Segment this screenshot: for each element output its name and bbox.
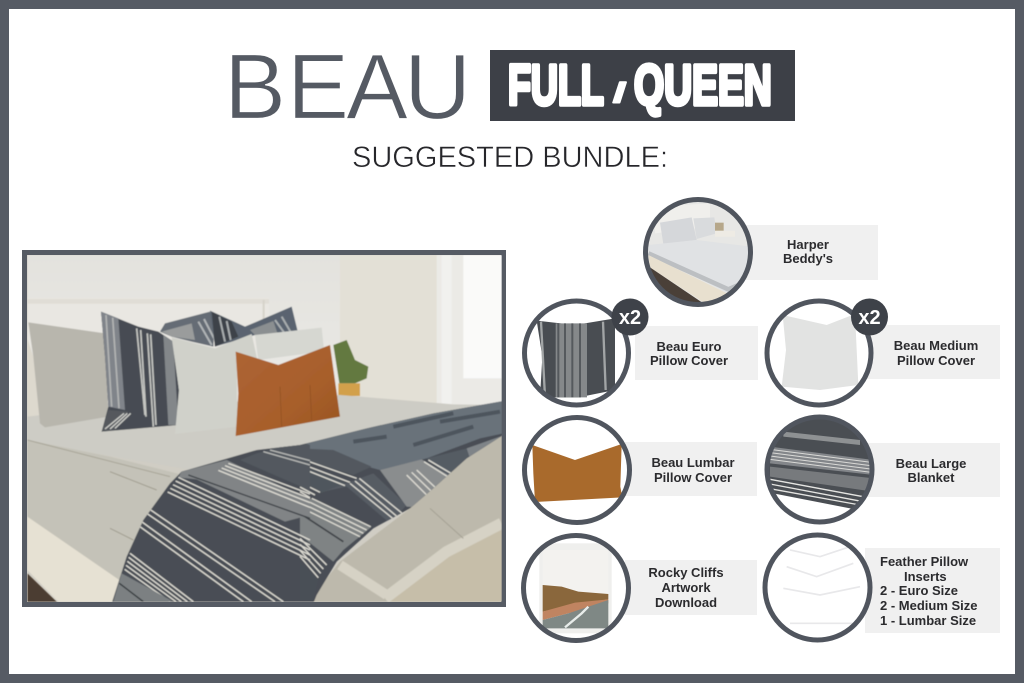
label text: Download xyxy=(655,595,717,610)
label box xyxy=(625,560,757,615)
size banner: FULL/QUEEN: / xyxy=(613,78,626,108)
leather lumbar pillow xyxy=(236,345,340,436)
panel: bedroom photo xyxy=(24,252,504,604)
item: Rocky Cliffs Artwork Download xyxy=(520,532,757,647)
ring xyxy=(524,301,628,405)
product thumbnail xyxy=(782,316,868,390)
size banner: FULL/QUEEN: QUEEN xyxy=(634,54,772,117)
ring xyxy=(646,200,750,304)
label text: Beau Medium xyxy=(894,338,978,353)
blanket xyxy=(110,400,503,603)
x2 badge xyxy=(612,298,648,336)
back left euro pillow xyxy=(160,312,214,347)
x2 badge: x2 xyxy=(619,307,641,329)
ring xyxy=(524,536,628,640)
label text: Pillow Cover xyxy=(650,353,728,368)
item: Beau Large Blanket xyxy=(760,412,1000,530)
label text: Beau Lumbar xyxy=(651,455,735,470)
size banner: FULL/QUEEN: FULL xyxy=(508,55,604,117)
label text: Beddy's xyxy=(783,251,833,266)
ring xyxy=(524,418,630,522)
label text: Artwork xyxy=(661,580,711,595)
ring xyxy=(767,301,871,405)
label text: Harper xyxy=(787,237,829,252)
product thumbnail xyxy=(532,444,627,502)
label text: Pillow Cover xyxy=(897,353,975,368)
headboard xyxy=(28,300,268,319)
walls and window xyxy=(27,255,503,415)
front euro pillow xyxy=(101,312,179,432)
white pillow back xyxy=(255,328,324,360)
x2 badge: x2 xyxy=(858,307,881,329)
hatched band left xyxy=(178,460,310,522)
floor xyxy=(27,573,58,603)
product thumbnail xyxy=(770,420,870,508)
label text: 1 - Lumbar Size xyxy=(880,613,976,628)
label text: Inserts xyxy=(904,569,947,584)
back right euro pillow xyxy=(210,307,299,347)
label box xyxy=(865,548,1000,633)
mattress right xyxy=(307,432,503,603)
product thumbnail xyxy=(648,202,748,302)
blanket upper blue-grey section xyxy=(300,401,503,470)
label text: Beau Euro xyxy=(656,339,722,354)
item: Feather Pillow Inserts xyxy=(760,530,1000,646)
grey sham pillow xyxy=(28,322,108,427)
item: Beau Lumbar Pillow Cover xyxy=(520,415,757,530)
label box xyxy=(865,443,1000,497)
bed frame xyxy=(27,517,122,603)
bed top xyxy=(102,394,480,466)
cream back pillow xyxy=(28,341,40,416)
size banner: FULL/QUEEN xyxy=(490,50,795,121)
ring xyxy=(767,417,872,522)
x2 badge xyxy=(851,298,888,336)
ring xyxy=(765,535,870,640)
white pillow front xyxy=(172,334,257,434)
product thumbnail xyxy=(537,318,615,398)
label text: Beau Large xyxy=(896,456,966,471)
product thumbnail xyxy=(540,544,626,634)
label box xyxy=(635,326,758,380)
label text: Blanket xyxy=(908,470,955,485)
title: BEAU: BEAU xyxy=(224,35,471,139)
label text: Feather Pillow xyxy=(880,554,969,569)
dark bands xyxy=(310,448,371,474)
product thumbnail xyxy=(783,547,868,624)
label text: Pillow Cover xyxy=(654,470,732,485)
item: Harper Beddy's xyxy=(640,195,878,311)
label text: 2 - Medium Size xyxy=(880,598,978,613)
grey hatched bands xyxy=(380,459,448,508)
label box xyxy=(625,442,757,496)
label box xyxy=(740,225,878,280)
label text: Rocky Cliffs xyxy=(648,565,724,580)
mattress side xyxy=(27,440,183,603)
label text: 2 - Euro Size xyxy=(880,583,958,598)
subtitle: suggested bundle: SUGGESTED BUNDLE: xyxy=(352,141,668,174)
plant and side table xyxy=(333,340,368,396)
item: Beau Medium Pillow Cover xyxy=(760,295,1000,413)
item: Beau Euro Pillow Cover xyxy=(520,295,758,410)
label box xyxy=(865,325,1000,379)
